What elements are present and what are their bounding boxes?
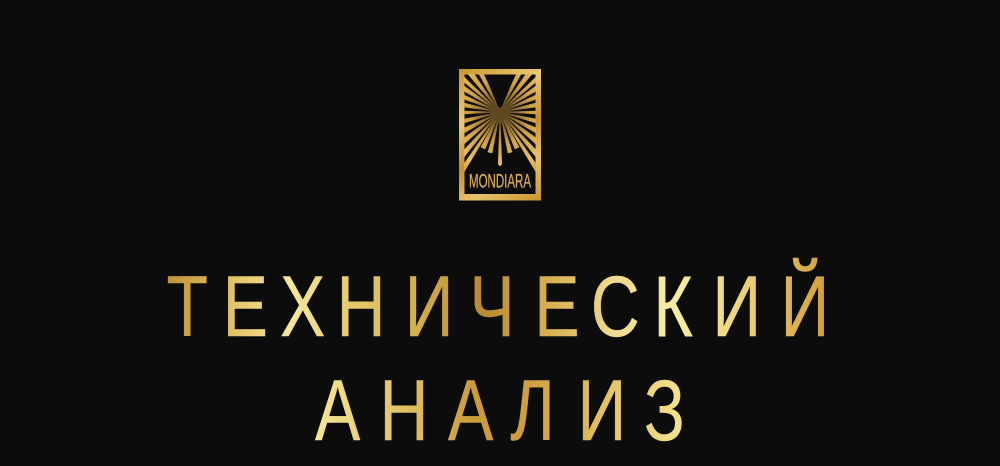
logo frame <box>459 69 541 200</box>
logo wordmark: MONDIARA <box>469 170 531 192</box>
logo top notch <box>484 74 516 107</box>
infographic canvas <box>168 69 824 442</box>
logo heart centre <box>489 104 511 125</box>
title line 1: ТЕХНИЧЕСКИЙ <box>167 258 829 355</box>
logo rays <box>464 74 536 172</box>
logo: Mondiara emblem <box>459 69 541 200</box>
title line 2: АНАЛИЗ <box>315 363 685 459</box>
